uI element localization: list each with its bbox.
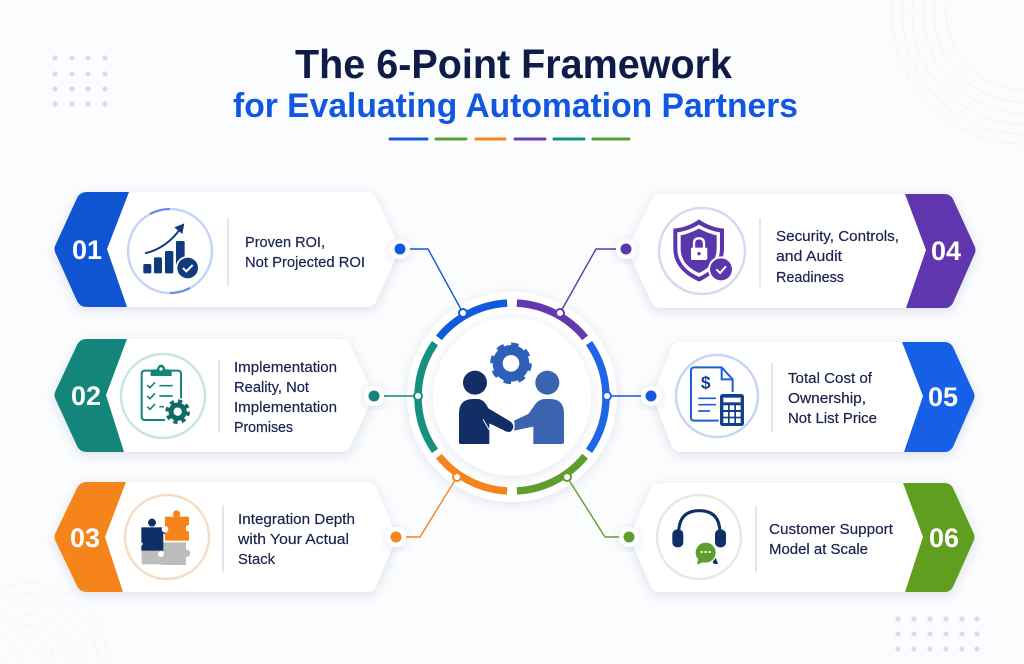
- card 02: Implementation Reality: 02: [71, 381, 101, 411]
- icon: shield and lock: [673, 219, 734, 282]
- card 01: Proven ROI: 01: [72, 235, 102, 265]
- text: card 04: and Audit: [776, 248, 843, 265]
- text: card 01: Proven ROI,: [245, 234, 325, 251]
- text: card 02: Implementation: [234, 359, 337, 376]
- text: card 01: [245, 234, 365, 271]
- icon: growth chart: [143, 223, 200, 280]
- connectors: [374, 249, 651, 537]
- text: card 03: Stack: [238, 551, 275, 568]
- text: card 05: Ownership,: [788, 390, 866, 407]
- icon: headset and chat: [672, 511, 726, 565]
- text: card 05: Not List Price: [788, 410, 877, 427]
- text: card 06: [769, 521, 894, 558]
- text: card 06: Model at Scale: [769, 541, 868, 558]
- connector end dots: [364, 239, 661, 547]
- text: card 04: [776, 228, 899, 286]
- card 05: Total Cost: 05: [928, 382, 958, 412]
- title: for Evaluating Automation Partners: [233, 87, 798, 125]
- card 04: Security: 04: [931, 236, 961, 266]
- icon: invoice and calculator: $: [701, 373, 711, 393]
- title: The 6-Point Framework: [295, 41, 732, 87]
- text: card 02: [234, 359, 337, 436]
- text: card 03: Integration Depth: [238, 511, 355, 528]
- ring nodes: [414, 309, 611, 481]
- card 03: Integration Depth: 03: [70, 523, 100, 553]
- icon: puzzle pieces: [139, 510, 192, 565]
- card 03: Integration Depth: [54, 482, 396, 592]
- icon: invoice and calculator: [691, 367, 744, 426]
- card 04: Security: [628, 194, 976, 308]
- card 01: Proven ROI: [54, 192, 399, 307]
- text: card 05: [788, 370, 877, 427]
- text: card 02: Implementation: [234, 399, 337, 416]
- text: card 03: [237, 511, 355, 568]
- text: card 04: Readiness: [776, 269, 844, 286]
- icon: clipboard and gear: [142, 365, 189, 423]
- text: card 02: Reality, Not: [234, 379, 310, 396]
- text: card 05: Total Cost of: [788, 370, 873, 387]
- text: card 06: Customer Support: [769, 521, 894, 538]
- text: card 01: Not Projected ROI: [245, 254, 365, 271]
- title: [233, 41, 798, 125]
- text: card 04: Security, Controls,: [776, 228, 899, 245]
- text: card 03: with Your Actual: [237, 531, 349, 548]
- text: card 02: Promises: [234, 419, 293, 436]
- central hub: [407, 292, 617, 502]
- icon: handshake and gear: [459, 345, 564, 444]
- card 06: Customer Support: 06: [929, 523, 959, 553]
- card 02: Implementation Reality: [54, 339, 373, 452]
- card 06: Customer Support: [630, 483, 974, 592]
- card 05: Total Cost: [653, 342, 974, 452]
